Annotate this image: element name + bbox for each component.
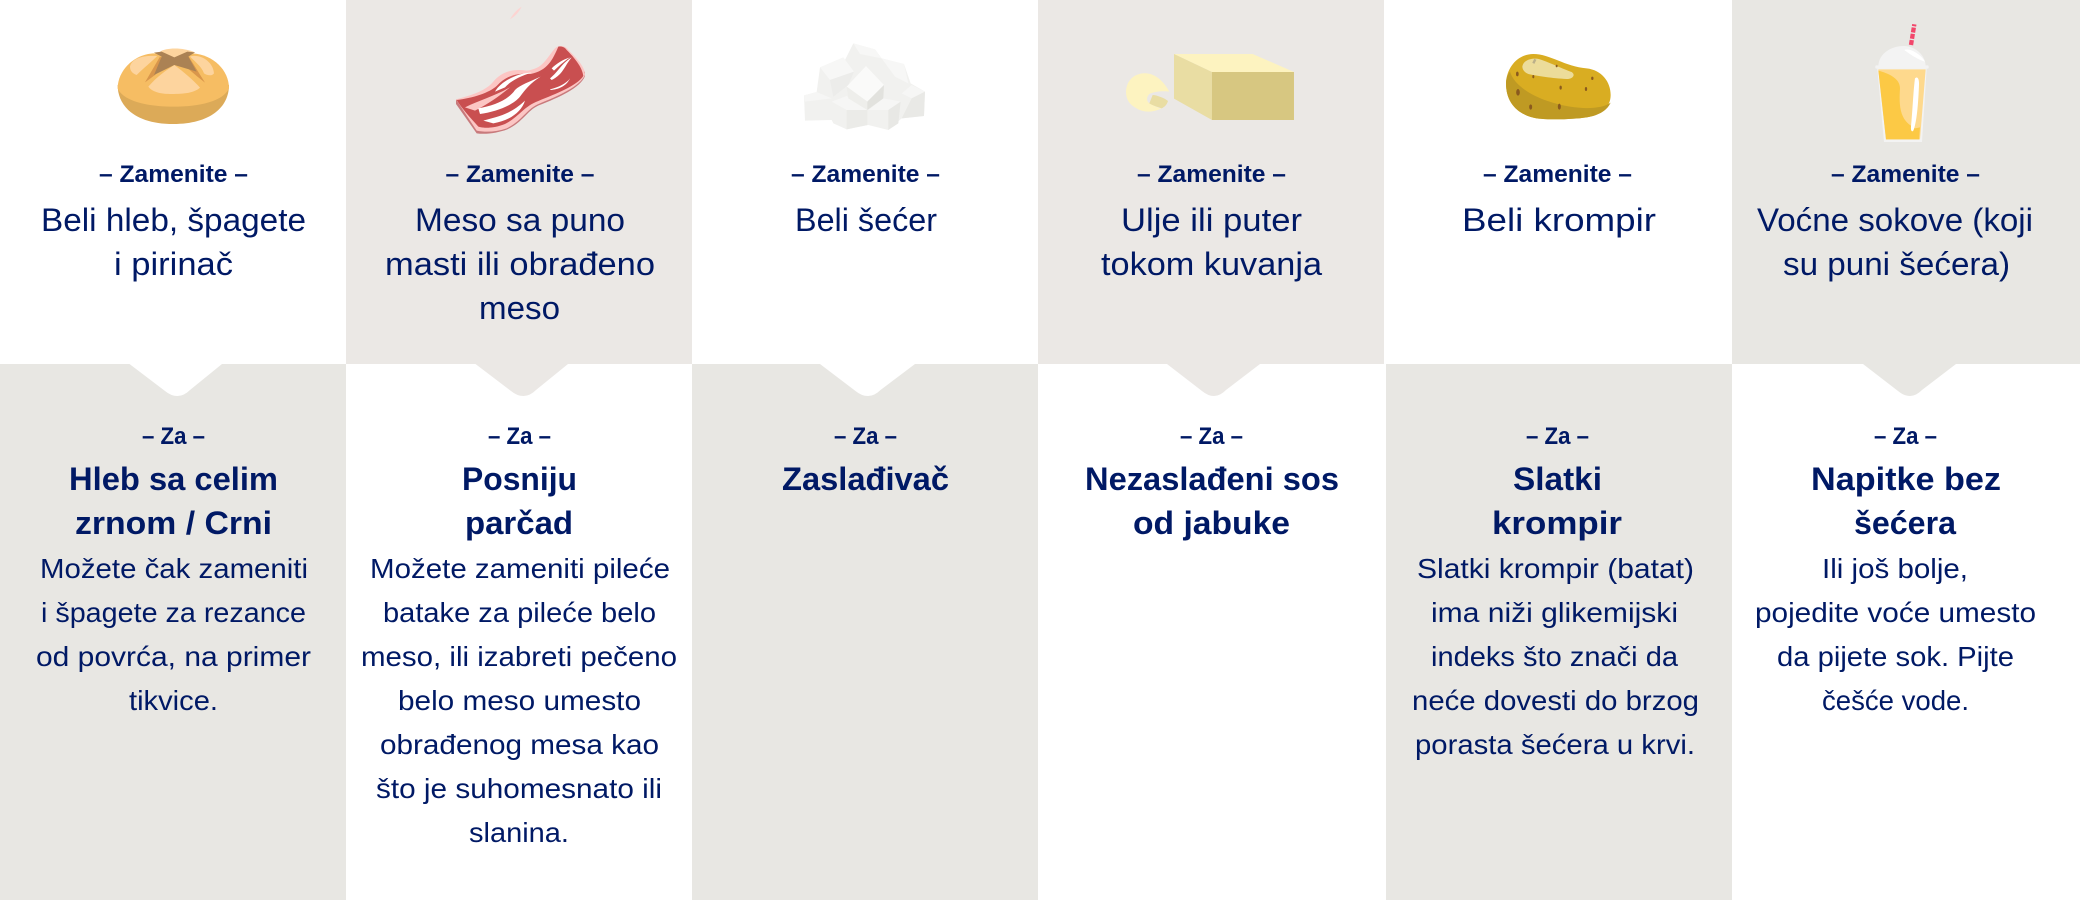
panel: sweetener bbox=[782, 423, 949, 497]
label: replace: – Zamenite – bbox=[791, 161, 940, 188]
heading: Zaslađivač bbox=[782, 461, 949, 497]
label: replace: – Zamenite – bbox=[99, 161, 248, 188]
item to replace: Meso sa puno bbox=[415, 202, 625, 238]
icon: butter block and curl bbox=[1126, 54, 1294, 120]
body text: Možete čak zameniti bbox=[40, 553, 308, 584]
panel: replace white potato bbox=[1462, 54, 1656, 238]
heading bbox=[1085, 461, 1339, 541]
panel: sugar-free drinks bbox=[1755, 423, 2036, 716]
body text: i špagete za rezance bbox=[41, 597, 306, 628]
label: instead: – Za – bbox=[142, 423, 205, 450]
heading: parčad bbox=[465, 505, 573, 541]
item to replace: Voćne sokove (koji bbox=[1757, 202, 2033, 238]
arrow: notch column 3 bbox=[820, 364, 915, 396]
body text: Možete zameniti pileće bbox=[370, 553, 670, 584]
body text: češće vode. bbox=[1822, 685, 1969, 716]
heading: Nezaslađeni sos bbox=[1085, 461, 1339, 497]
panel: replace oil or butter bbox=[1101, 54, 1322, 282]
body text: batake za pileće belo bbox=[383, 597, 656, 628]
body text: tikvice. bbox=[129, 685, 218, 716]
body text: Slatki krompir (batat) bbox=[1417, 553, 1694, 584]
panel: replace fatty meat bbox=[385, 7, 655, 326]
body text: slanina. bbox=[469, 817, 569, 848]
body text: porasta šećera u krvi. bbox=[1415, 729, 1695, 760]
icon: potato bbox=[1506, 54, 1611, 119]
body text bbox=[36, 553, 311, 716]
heading: zrnom / Crni bbox=[75, 505, 272, 541]
body text: Ili još bolje, bbox=[1822, 553, 1968, 584]
item to replace: su puni šećera) bbox=[1783, 246, 2010, 282]
heading: Napitke bez bbox=[1811, 461, 2001, 497]
body text: od povrća, na primer bbox=[36, 641, 311, 672]
panel: replace fruit juice bbox=[1757, 24, 2033, 282]
panel: sweet potato bbox=[1412, 423, 1699, 760]
heading bbox=[69, 461, 278, 541]
heading: od jabuke bbox=[1133, 505, 1290, 541]
item to replace bbox=[1101, 202, 1322, 282]
panel: lean meat bbox=[361, 423, 677, 848]
item to replace: Beli hleb, špagete bbox=[41, 202, 306, 238]
item to replace: tokom kuvanja bbox=[1101, 246, 1322, 282]
body text: obrađenog mesa kao bbox=[380, 729, 659, 760]
body text bbox=[1412, 553, 1699, 760]
body text: ima niži glikemijski bbox=[1431, 597, 1678, 628]
icon: bacon bbox=[456, 7, 585, 134]
label: replace: – Zamenite – bbox=[1137, 161, 1286, 188]
arrow: notch column 4 bbox=[1167, 364, 1260, 396]
panel: replace white sugar bbox=[791, 43, 940, 238]
body text bbox=[1755, 553, 2036, 716]
body text: pojedite voće umesto bbox=[1755, 597, 2036, 628]
arrow: notch column 1 bbox=[130, 364, 222, 396]
icon: bread roll bbox=[118, 48, 229, 124]
heading: Hleb sa celim bbox=[69, 461, 278, 497]
icon: juice cup with straw bbox=[1875, 24, 1929, 142]
heading bbox=[462, 461, 577, 541]
item to replace: Beli šećer bbox=[795, 202, 937, 238]
label: instead: – Za – bbox=[834, 423, 897, 450]
item to replace: meso bbox=[479, 290, 560, 326]
item to replace bbox=[41, 202, 306, 282]
label: instead: – Za – bbox=[1180, 423, 1243, 450]
panel: unsweetened apple sauce bbox=[1085, 423, 1339, 541]
arrow: notch column 2 bbox=[476, 364, 568, 396]
panel: whole grain bread bbox=[36, 423, 311, 716]
item to replace bbox=[1757, 202, 2033, 282]
body text: da pijete sok. Pijte bbox=[1777, 641, 2014, 672]
item to replace bbox=[385, 202, 655, 326]
item to replace: Beli krompir bbox=[1462, 202, 1656, 238]
panel: replace white bread bbox=[41, 48, 306, 282]
heading bbox=[1811, 461, 2001, 541]
label: replace: – Zamenite – bbox=[1831, 161, 1980, 188]
label: replace: – Zamenite – bbox=[1483, 161, 1632, 188]
label: instead: – Za – bbox=[1526, 423, 1589, 450]
heading: šećera bbox=[1854, 505, 1956, 541]
item to replace: masti ili obrađeno bbox=[385, 246, 655, 282]
label: replace: – Zamenite – bbox=[446, 161, 594, 188]
heading: Slatki bbox=[1513, 461, 1602, 497]
heading bbox=[1492, 461, 1622, 541]
body text: belo meso umesto bbox=[398, 685, 641, 716]
item to replace: Ulje ili puter bbox=[1121, 202, 1302, 238]
icon: sugar cubes bbox=[804, 43, 925, 130]
label: instead: – Za – bbox=[488, 423, 551, 450]
heading: krompir bbox=[1492, 505, 1622, 541]
body text: indeks što znači da bbox=[1431, 641, 1678, 672]
heading: Posniju bbox=[462, 461, 577, 497]
item to replace: i pirinač bbox=[114, 246, 233, 282]
body text bbox=[361, 553, 677, 848]
body text: meso, ili izabreti pečeno bbox=[361, 641, 677, 672]
body text: neće dovesti do brzog bbox=[1412, 685, 1699, 716]
body text: što je suhomesnato ili bbox=[376, 773, 662, 804]
arrow: notch column 6 bbox=[1863, 364, 1956, 396]
label: instead: – Za – bbox=[1874, 423, 1937, 450]
